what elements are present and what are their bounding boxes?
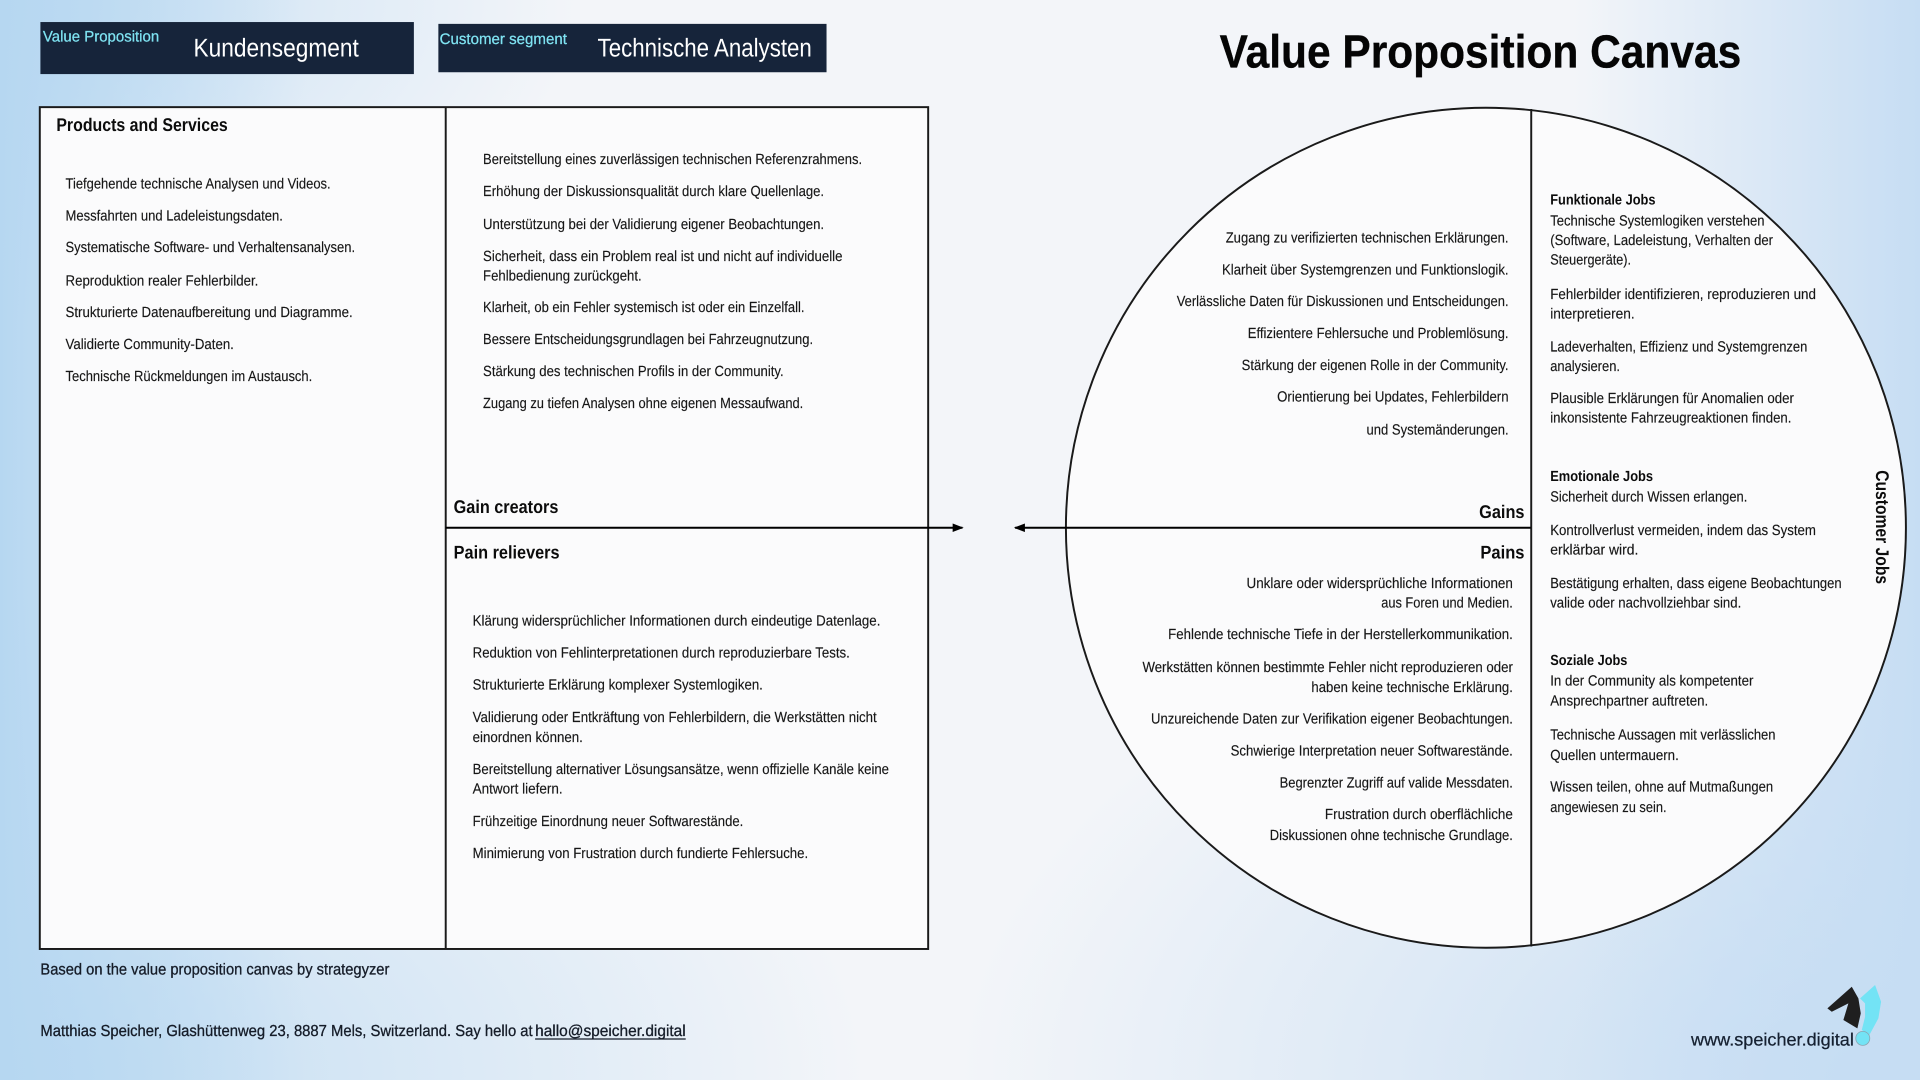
panel: products and services (56, 115, 355, 384)
panel: pains: Unklare oder widersprüchliche Informationen (1247, 574, 1513, 591)
functional jobs: analysieren. (1550, 358, 1620, 375)
panel: pains: aus Foren und Medien. (1381, 594, 1513, 611)
panel: gain creators: Erhöhung der Diskussionsqualität durch klare Quellenlage. (483, 182, 824, 200)
social jobs: Technische Aussagen mit verlässlichen (1550, 726, 1776, 743)
contact line: Matthias Speicher, Glashüttenweg 23, 8887 Mels, Switzerland. Say hello at (40, 1021, 533, 1040)
panel: gains: Stärkung der eigenen Rolle in der Community. (1242, 356, 1509, 373)
header box: customer segment: Technische Analysten (598, 34, 812, 62)
panel: value proposition square (40, 107, 962, 949)
emotional jobs: erklärbar wird. (1550, 541, 1638, 558)
panel: pains: haben keine technische Erklärung. (1311, 678, 1513, 696)
panel: pain relievers: Frühzeitige Einordnung neuer Softwarestände. (473, 812, 743, 830)
panel: gains (1177, 229, 1524, 523)
functional jobs: Fehlerbilder identifizieren, reproduzieren und (1550, 285, 1816, 302)
panel: gain creators: Zugang zu tiefen Analysen ohne eigenen Messaufwand. (483, 394, 803, 411)
panel: pain relievers: Bereitstellung alternativer Lösungsansätze, wenn offizielle Kanäle keine (473, 760, 889, 778)
panel: products and services: Reproduktion realer Fehlerbilder. (66, 272, 258, 289)
emotional jobs: Bestätigung erhalten, dass eigene Beobachtungen (1550, 574, 1842, 591)
panel: products and services: Messfahrten und Ladeleistungsdaten. (66, 207, 283, 224)
social jobs: Soziale Jobs (1550, 651, 1628, 669)
panel: pain relievers: einordnen können. (473, 729, 583, 746)
panel: products and services: Products and Services (56, 115, 228, 136)
panel: pains: Begrenzter Zugriff auf valide Messdaten. (1280, 774, 1513, 791)
panel: pain relievers: Antwort liefern. (473, 780, 563, 797)
panel: gain creators (454, 151, 862, 518)
website url: www.speicher.digital (1690, 1031, 1854, 1051)
panel: gain creators: Unterstützung bei der Validierung eigener Beobachtungen. (483, 216, 824, 233)
social jobs: In der Community als kompetenter (1550, 672, 1753, 689)
panel: pains: Werkstätten können bestimmte Fehler nicht reproduzieren oder (1142, 659, 1513, 676)
emotional jobs: Sicherheit durch Wissen erlangen. (1550, 488, 1747, 505)
panel: pain relievers: Strukturierte Erklärung komplexer Systemlogiken. (473, 676, 763, 693)
header box: customer segment: Customer segment (440, 31, 568, 48)
emotional jobs: Emotionale Jobs (1550, 468, 1653, 485)
panel: products and services: Systematische Software- und Verhaltensanalysen. (66, 239, 355, 256)
panel: gains: Verlässliche Daten für Diskussionen und Entscheidungen. (1177, 293, 1509, 310)
panel: gains: Klarheit über Systemgrenzen und Funktionslogik. (1222, 261, 1509, 278)
panel: products and services: Strukturierte Datenaufbereitung und Diagramme. (66, 304, 353, 321)
functional jobs: Ladeverhalten, Effizienz und Systemgrenzen (1550, 338, 1807, 355)
panel: products and services: Technische Rückmeldungen im Austausch. (66, 367, 312, 384)
panel: products and services: Validierte Community-Daten. (66, 336, 234, 353)
functional jobs: Technische Systemlogiken verstehen (1550, 212, 1764, 229)
panel: gains: und Systemänderungen. (1367, 421, 1509, 438)
functional jobs: Steuergeräte). (1550, 251, 1631, 268)
header box: value proposition (40, 22, 414, 74)
functional jobs: inkonsistente Fahrzeugreaktionen finden. (1550, 409, 1791, 426)
functional jobs: (Software, Ladeleistung, Verhalten der (1550, 231, 1773, 249)
panel: pain relievers: Minimierung von Frustration durch fundierte Fehlersuche. (473, 844, 808, 861)
attribution note: Based on the value proposition canvas by strategyzer (40, 960, 390, 978)
social jobs: Ansprechpartner auftreten. (1550, 692, 1708, 709)
icon: speicher logo (1827, 985, 1881, 1045)
social jobs: angewiesen zu sein. (1550, 798, 1667, 816)
panel: pain relievers: Reduktion von Fehlinterpretationen durch reproduzierbare Tests. (473, 644, 850, 661)
panel: gains: Effizientere Fehlersuche und Problemlösung. (1248, 324, 1509, 342)
emotional jobs (1550, 468, 1842, 611)
header box: value proposition: Kundensegment (193, 34, 359, 62)
panel: gains: Gains (1479, 502, 1524, 523)
panel: pains (1142, 542, 1524, 844)
panel: gain creators: Bessere Entscheidungsgrundlagen bei Fahrzeugnutzung. (483, 331, 813, 348)
social jobs (1550, 651, 1776, 816)
panel: customer profile circle (1015, 108, 1906, 948)
contact line: hallo@speicher.digital (535, 1021, 686, 1040)
functional jobs (1550, 191, 1816, 426)
panel: gain creators: Klarheit, ob ein Fehler systemisch ist oder ein Einzelfall. (483, 299, 804, 316)
social jobs: Quellen untermauern. (1550, 746, 1679, 763)
functional jobs: interpretieren. (1550, 305, 1635, 322)
header box: customer segment (438, 24, 827, 72)
panel: gain creators: Fehlbedienung zurückgeht. (483, 267, 642, 284)
arrow: circle to square (1015, 527, 1531, 529)
functional jobs: Plausible Erklärungen für Anomalien oder (1550, 389, 1794, 407)
panel: customer jobs (1550, 191, 1892, 816)
panel: gains: Zugang zu verifizierten technischen Erklärungen. (1226, 229, 1509, 246)
panel: gain creators: Gain creators (454, 497, 558, 518)
panel: gains: Orientierung bei Updates, Fehlerbildern (1277, 388, 1509, 405)
emotional jobs: Kontrollverlust vermeiden, indem das System (1550, 522, 1816, 539)
panel: pains: Pains (1480, 542, 1524, 563)
arrow: square to circle (446, 527, 962, 529)
panel: pain relievers: Pain relievers (454, 542, 560, 563)
panel: products and services: Tiefgehende technische Analysen und Videos. (66, 175, 331, 192)
panel: gain creators: Bereitstellung eines zuverlässigen technischen Referenzrahmens. (483, 151, 862, 168)
emotional jobs: valide oder nachvollziehbar sind. (1550, 594, 1741, 611)
panel: gain creators: Stärkung des technischen Profils in der Community. (483, 362, 784, 380)
panel: pain relievers (454, 542, 889, 861)
customer jobs label: Customer Jobs (1871, 470, 1892, 584)
panel: pain relievers: Validierung oder Entkräftung von Fehlerbildern, die Werkstätten nicht (473, 708, 877, 726)
panel: gain creators: Sicherheit, dass ein Problem real ist und nicht auf individuelle (483, 247, 843, 264)
social jobs: Wissen teilen, ohne auf Mutmaßungen (1550, 778, 1773, 795)
functional jobs: Funktionale Jobs (1550, 191, 1656, 208)
panel: pains: Frustration durch oberflächliche (1325, 806, 1513, 823)
header box: value proposition: Value Proposition (43, 28, 159, 45)
panel: pains: Fehlende technische Tiefe in der Herstellerkommunikation. (1168, 626, 1513, 643)
panel: pains: Diskussionen ohne technische Grundlage. (1270, 827, 1513, 844)
panel: pains: Schwierige Interpretation neuer Softwarestände. (1231, 742, 1513, 759)
panel: pains: Unzureichende Daten zur Verifikation eigener Beobachtungen. (1151, 710, 1513, 727)
panel: pain relievers: Klärung widersprüchlicher Informationen durch eindeutige Datenlage. (473, 612, 880, 629)
title: Value Proposition Canvas (1220, 27, 1741, 78)
